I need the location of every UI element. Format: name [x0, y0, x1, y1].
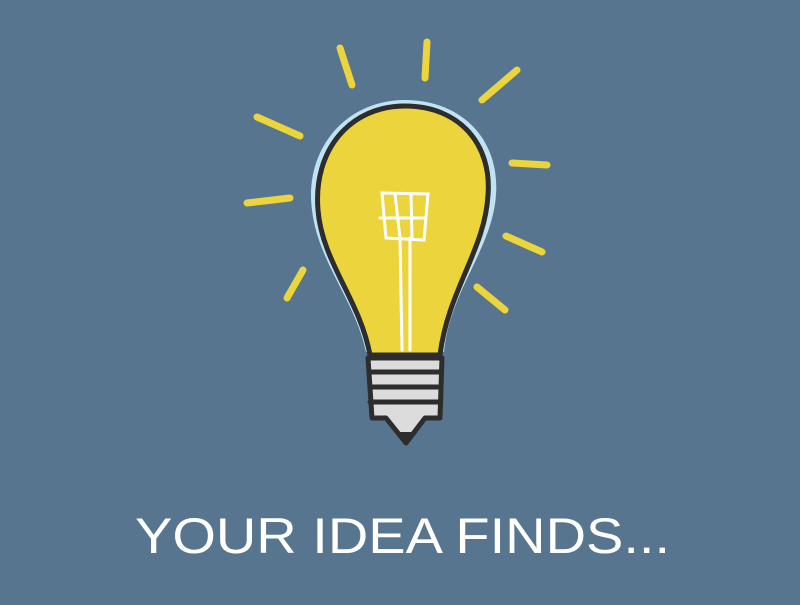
- icon: light bulb: [311, 100, 496, 443]
- filament: [380, 193, 428, 350]
- caption: YOUR IDEA FINDS...: [135, 508, 670, 564]
- icon: light rays: [247, 42, 547, 310]
- bulb base: [368, 358, 442, 443]
